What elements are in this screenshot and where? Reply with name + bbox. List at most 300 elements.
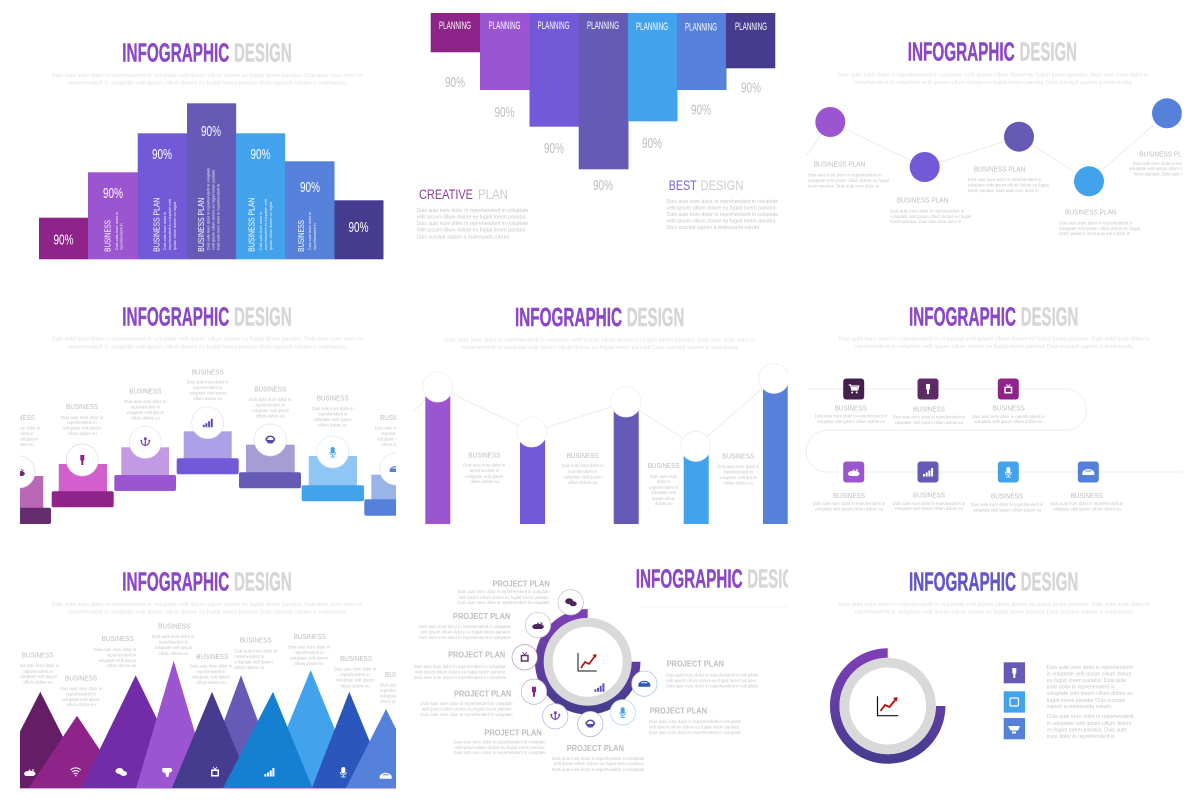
column labels: reprehenderit in xyxy=(649,485,679,490)
timeline: BUSINESS PLAN xyxy=(1139,150,1191,159)
mountain labels: Duis aute irure dolor in xyxy=(17,663,60,668)
project plan labels: PROJECT PLAN xyxy=(492,579,550,588)
subtitle xyxy=(838,602,1150,616)
pedestals xyxy=(20,406,396,524)
pedestal labels: voluptate velit ipsum xyxy=(0,436,38,442)
project plan labels: Duis aute irure dolor in reprehenderit in voluptate xyxy=(421,701,513,706)
pedestal labels: cillum dolore eu xyxy=(67,431,97,436)
project plan labels: PROJECT PLAN xyxy=(650,706,707,715)
mountain labels: BUSINESS xyxy=(294,632,326,641)
title: DESIGN xyxy=(234,301,292,331)
vertical bar labels: Duis aute irure dolor in xyxy=(163,212,167,250)
mountain labels: Duis aute irure dolor in xyxy=(234,648,278,654)
mountain labels: cillum dolore eu xyxy=(380,699,410,704)
best design text: BEST xyxy=(669,178,697,193)
column labels: reprehenderit in xyxy=(724,470,754,474)
panel: circle timeline xyxy=(806,37,1200,236)
subtitle xyxy=(51,337,363,350)
project plan labels: Duis aute irure dolor in reprehenderit in voluptate xyxy=(649,719,742,724)
title: INFOGRAPHIC xyxy=(122,38,229,68)
mountain labels: cillum dolore eu xyxy=(107,663,137,668)
mountain labels: BUSINESS xyxy=(340,654,372,663)
best design text: Duis aute irure dolor in reprehenderit in voluptate xyxy=(667,212,778,218)
column labels xyxy=(463,450,760,506)
mountain labels: Duis aute irure dolor in xyxy=(288,644,331,650)
panel: lollipop columns xyxy=(413,302,789,524)
percent labels: 90% xyxy=(201,123,221,140)
timeline: voluptate velit ipsum cillum dolore eu fugiat xyxy=(808,178,890,183)
pedestal labels: BUSINESS xyxy=(3,413,35,422)
pedestal labels: Duis aute irure dolor in xyxy=(187,380,229,384)
path labels: Duis aute irure dolor in reprehenderit in xyxy=(971,502,1044,507)
creative plan text xyxy=(417,187,528,240)
title: DESIGN xyxy=(234,566,292,596)
percent labels: 90% xyxy=(152,146,172,163)
project plan labels: PROJECT PLAN xyxy=(454,690,511,699)
path labels: voluptate velit ipsum cillum dolore eu xyxy=(973,508,1042,512)
column labels: Duis aute irure dolor in xyxy=(562,463,604,468)
mountain labels: reprehenderit in xyxy=(294,650,324,655)
mountain labels: cillum dolore eu xyxy=(294,661,324,666)
radial ring xyxy=(540,614,636,710)
subtitle: Duis aute irure dolor in reprehenderit in voluptate velit ipsum cillum dolore eu fugiat lorem pariatur. Duis aute irure dolor in xyxy=(838,337,1150,343)
panel: stepped pedestals xyxy=(0,301,426,524)
project plan labels: Duis aute irure dolor in reprehenderit in voluptate xyxy=(666,684,759,688)
project plan labels: Duis aute irure dolor in reprehenderit in voluptate xyxy=(454,740,546,744)
bars xyxy=(39,103,384,259)
body text: irure dolor in reprehenderit in xyxy=(1047,734,1115,740)
mountain labels: reprehenderit in xyxy=(234,654,265,659)
body text: in voluptate velit ipsum cillum dolore xyxy=(1047,672,1132,678)
creative plan text: Duis aute irure dolor in reprehenderit in voluptate xyxy=(417,208,528,214)
pedestal labels: Duis aute irure dolor in xyxy=(249,397,292,402)
path labels: Duis aute irure dolor in reprehenderit in xyxy=(972,414,1045,419)
timeline: Duis aute irure dolor in reprehenderit in xyxy=(968,177,1042,182)
percent labels: 90% xyxy=(250,146,270,163)
pedestal labels: reprehenderit in xyxy=(193,385,223,390)
planning labels: PLANNING xyxy=(538,20,570,32)
project plan labels: velit ipsum cillum dolore eu fugiat lorem pariatur. xyxy=(666,678,757,683)
pedestal labels: voluptate velit ipsum xyxy=(314,417,352,422)
path labels: Duis aute irure dolor in reprehenderit in xyxy=(813,501,886,506)
vertical bar labels xyxy=(104,168,317,252)
vertical bar labels: velit ipsum cillum dolore eu fugiat lorem pariatur. xyxy=(212,169,216,250)
timeline: Duis aute irure dolor in reprehenderit in xyxy=(808,172,882,178)
title: DESIGN xyxy=(627,302,684,332)
project plan labels: velit ipsum cillum dolore eu fugiat lorem pariatur. xyxy=(649,724,740,730)
mountain labels: BUSINESS xyxy=(65,673,97,682)
subtitle xyxy=(51,73,363,86)
title: INFOGRAPHIC xyxy=(515,302,622,332)
body text: Duis aute irure dolor in reprehenderit xyxy=(1047,714,1134,720)
column labels: voluptate velit ipsum xyxy=(465,474,504,479)
planning labels xyxy=(439,20,767,33)
mountain labels: Duis aute irure dolor in xyxy=(380,682,423,688)
column labels: BUSINESS xyxy=(648,461,680,470)
divider xyxy=(639,606,788,607)
column labels: BUSINESS xyxy=(722,451,754,460)
project plan labels: Duis aute irure dolor in reprehenderit in voluptate xyxy=(666,672,759,678)
winding track xyxy=(806,389,1183,472)
percent labels: 90% xyxy=(348,219,368,236)
path labels: BUSINESS xyxy=(913,491,945,500)
percent labels: 90% xyxy=(300,179,320,196)
pedestal labels: reprehenderit in xyxy=(131,404,161,410)
subtitle xyxy=(837,72,1149,86)
percent labels: 90% xyxy=(642,135,662,152)
subtitle xyxy=(444,338,756,351)
project plan labels: Duis aute irure dolor in reprehenderit in voluptate xyxy=(458,589,550,594)
project plan labels: velit ipsum cillum dolore eu fugiat lorem pariatur. xyxy=(459,595,550,600)
mountain labels: BUSINESS xyxy=(102,634,134,643)
pedestal labels: reprehenderit in xyxy=(4,431,34,436)
body text: sapien a malesuada rutrum. xyxy=(1047,704,1112,710)
hanging bars xyxy=(431,13,775,169)
pedestal labels: BUSINESS xyxy=(317,393,349,402)
timeline: BUSINESS PLAN xyxy=(974,164,1025,173)
pedestal labels: reprehenderit in xyxy=(381,431,411,436)
column labels: cillum dolore eu xyxy=(724,480,754,486)
project plan labels: Duis aute irure dolor in reprehenderit in voluptate xyxy=(552,767,645,772)
column labels: voluptate velit xyxy=(651,490,677,495)
creative plan text: Duis suscipit sapien a malesuada rutrum. xyxy=(417,234,511,240)
timeline: lorem pariatur. Duis aute irure dolor in xyxy=(968,188,1039,193)
path labels: voluptate velit ipsum cillum dolore eu xyxy=(817,419,886,424)
path labels: voluptate velit ipsum cillum dolore eu xyxy=(895,506,964,511)
mountain labels: cillum dolore eu xyxy=(23,680,53,684)
vertical bar labels: BUSINESS xyxy=(104,220,112,252)
percent labels: 90% xyxy=(593,177,613,194)
planning labels: PLANNING xyxy=(488,20,520,32)
mountain labels: voluptate velit ipsum xyxy=(380,694,419,698)
path labels: Duis aute irure dolor in reprehenderit in xyxy=(815,414,888,418)
title: DESIGN xyxy=(747,563,805,593)
subtitle: reprehenderit in voluptate velit ipsum cillum dolore eu fugiat lorem pariatur Duis suscipit sapien a malesuada xyxy=(68,344,347,350)
pedestal labels: voluptate velit ipsum xyxy=(189,390,227,396)
project plan labels: PROJECT PLAN xyxy=(453,612,510,621)
vertical bar labels: Duis aute irure dolor in xyxy=(115,212,119,250)
pedestal labels: cillum dolore eu xyxy=(131,416,161,420)
mountain labels: voluptate velit ipsum xyxy=(336,678,374,682)
title: INFOGRAPHIC xyxy=(636,563,743,593)
timeline: BUSINESS PLAN xyxy=(897,196,948,205)
vertical bar labels: reprehenderit in xyxy=(313,223,317,250)
path labels: BUSINESS xyxy=(993,404,1025,413)
percent labels: 90% xyxy=(544,140,564,157)
project plan labels: PROJECT PLAN xyxy=(448,651,505,660)
title: DESIGN xyxy=(234,38,292,68)
planning labels: PLANNING xyxy=(735,21,767,33)
mountain labels: reprehenderit in xyxy=(196,669,226,674)
icon squares xyxy=(1004,662,1025,739)
mountain labels: cillum dolore eu xyxy=(66,702,96,707)
mountain labels: voluptate velit ipsum xyxy=(290,656,328,660)
donut xyxy=(835,653,941,759)
body text: Duis aute irure dolor in reprehenderit xyxy=(1047,665,1133,671)
planning labels: PLANNING xyxy=(439,20,471,32)
subtitle xyxy=(51,602,363,616)
project plan labels: Duis aute irure dolor in reprehenderit in voluptate xyxy=(419,635,512,640)
timeline: BUSINESS PLAN xyxy=(1065,208,1117,217)
path labels: Duis aute irure dolor in reprehenderit in xyxy=(1050,501,1124,506)
best design text: DESIGN xyxy=(700,178,744,193)
icon tiles xyxy=(843,378,1099,482)
project plan labels: velit ipsum cillum dolore eu fugiat lorem pariatur. xyxy=(420,630,511,634)
pedestal labels: reprehenderit in xyxy=(256,402,286,408)
column labels: voluptate velit ipsum xyxy=(564,474,602,480)
project plan labels: Duis aute irure dolor in reprehenderit in voluptate xyxy=(458,600,550,605)
panel: mountain peaks xyxy=(20,572,396,788)
best design text: velit ipsum cillum dolore eu fugiat lorem pariatur. xyxy=(667,205,777,211)
vertical bar labels: ipsum cillum dolore eu fugiat xyxy=(173,201,177,250)
planning labels: PLANNING xyxy=(636,21,668,33)
body text: irure dolor in reprehenderit in xyxy=(1047,685,1115,691)
pedestal labels: cillum dolore eu xyxy=(256,414,286,418)
subtitle: Duis aute irure dolor in reprehenderit in voluptate velit ipsum cillum dolore eu fugiat lorem pariatur. Duis aute irure dolor in xyxy=(837,72,1149,78)
creative plan text: PLAN xyxy=(478,187,508,202)
percent labels: 90% xyxy=(691,101,711,118)
column labels: Duis aute irure xyxy=(650,474,678,479)
project plan labels: velit ipsum cillum dolore eu fugiat lorem pariatur. xyxy=(422,706,513,712)
title: DESIGN xyxy=(1021,566,1078,596)
subtitle: reprehenderit in voluptate velit ipsum cillum dolore eu fugiat lorem pariatur Duis suscipit sapien a malesuada xyxy=(854,80,1133,86)
mountain labels: cillum dolore eu xyxy=(159,651,189,656)
path labels: Duis aute irure dolor in reprehenderit in xyxy=(893,414,966,420)
body text: fugiat lorem pariatur Duis suscipit xyxy=(1047,698,1126,704)
subtitle: Duis aute irure dolor in reprehenderit in voluptate velit ipsum cillum dolore eu fugiat lorem pariatur. Duis aute irure dolor in xyxy=(838,602,1150,608)
mountain labels: Duis aute irure dolor in xyxy=(190,664,233,668)
mountain labels: cillum dolore eu xyxy=(340,684,370,688)
project plan labels: Duis aute irure dolor in reprehenderit in voluptate xyxy=(649,730,742,735)
panel: rising bar chart xyxy=(39,38,384,259)
planning labels: PLANNING xyxy=(685,21,717,33)
column labels: reprehenderit in xyxy=(568,469,598,474)
timeline: Duis aute irure dolor in reprehenderit in xyxy=(1059,220,1133,226)
pedestal labels: BUSINESS xyxy=(129,387,161,396)
path labels: voluptate velit ipsum cillum dolore eu xyxy=(815,506,884,512)
pedestal labels: Duis aute irure dolor in xyxy=(61,415,104,420)
title: DESIGN xyxy=(1020,37,1077,67)
column labels: dolor in xyxy=(657,479,671,484)
column labels: Duis aute irure dolor in xyxy=(463,462,506,468)
percent labels xyxy=(445,74,761,194)
vertical bar labels: Duis aute irure dolor in xyxy=(308,212,312,250)
title: INFOGRAPHIC xyxy=(908,37,1015,67)
pedestal labels: Duis aute irure dolor in xyxy=(124,399,167,404)
project plan labels: Duis aute irure dolor in reprehenderit in voluptate xyxy=(552,756,645,761)
timeline: lorem pariatur. Duis aute irure dolor in xyxy=(890,219,962,224)
title: INFOGRAPHIC xyxy=(122,301,229,331)
path labels: voluptate velit ipsum cillum dolore eu xyxy=(1052,506,1122,512)
percent labels: 90% xyxy=(54,232,74,248)
path labels: BUSINESS xyxy=(833,491,865,500)
panel: winding path xyxy=(806,301,1183,512)
mountain labels: BUSINESS xyxy=(385,670,417,679)
path labels: BUSINESS xyxy=(991,492,1023,501)
vertical bar labels: ipsum cillum dolore eu fugiat xyxy=(269,201,273,250)
title xyxy=(636,569,788,588)
pedestal labels: voluptate velit ipsum xyxy=(377,436,415,442)
column labels: BUSINESS xyxy=(567,451,599,460)
mountain labels xyxy=(20,624,396,706)
percent labels xyxy=(54,123,368,248)
pedestal labels: BUSINESS xyxy=(254,384,286,393)
pedestal labels: cillum dolore eu xyxy=(318,422,348,428)
mountain labels: reprehenderit in xyxy=(107,652,137,658)
vertical bar labels: reprehenderit in voluptate velit xyxy=(168,198,172,250)
vertical bar labels: BUSINESS xyxy=(297,220,306,252)
mountains xyxy=(20,660,396,788)
body text: eu fugiat lorem pariatur. Duis aute xyxy=(1047,728,1127,734)
vertical bar labels: BUSINESS PLAN xyxy=(197,198,206,252)
timeline xyxy=(806,98,1200,236)
timeline: voluptate velit ipsum cillum dolore eu fugiat xyxy=(890,214,972,219)
mountain labels: reprehenderit in xyxy=(66,692,96,696)
mountain labels: BUSINESS xyxy=(158,621,190,630)
title: INFOGRAPHIC xyxy=(122,566,229,596)
pedestal labels: BUSINESS xyxy=(380,413,412,422)
path labels xyxy=(813,403,1124,512)
pedestal labels: voluptate velit ipsum xyxy=(63,426,101,430)
mountain labels: Duis aute irure dolor in xyxy=(60,686,103,691)
project plan labels: velit ipsum cillum dolore eu fugiat lorem pariatur. xyxy=(415,670,506,674)
mountain labels: reprehenderit in xyxy=(340,672,370,677)
mountain labels: reprehenderit in xyxy=(380,688,410,693)
vertical bar labels: reprehenderit in voluptate velit xyxy=(264,198,268,250)
project plan labels: Duis aute irure dolor in reprehenderit in voluptate xyxy=(414,664,507,669)
vertical bar labels: Duis aute irure dolor in reprehenderit in voluptate xyxy=(206,168,210,250)
path labels: Duis aute irure dolor in reprehenderit in xyxy=(893,501,966,506)
pedestal labels: cillum dolore eu xyxy=(193,396,223,401)
subtitle: Duis aute irure dolor in reprehenderit in voluptate velit ipsum cillum dolore eu fugiat lorem pariatur. Duis aute irure dolor in xyxy=(51,602,363,608)
project plan labels xyxy=(414,579,759,772)
mountain labels: voluptate velit ipsum xyxy=(234,660,273,664)
creative plan text: Duis aute irure dolor in reprehenderit in voluptate xyxy=(417,221,528,227)
title: DESIGN xyxy=(1021,301,1078,331)
pedestal labels: BUSINESS xyxy=(192,367,224,376)
timeline: Duis aute irure dolor in reprehenderit in xyxy=(890,208,965,214)
mountain labels: reprehenderit in xyxy=(23,669,53,674)
path labels: voluptate velit ipsum cillum dolore eu xyxy=(974,419,1043,424)
mountain labels: BUSINESS xyxy=(196,652,228,661)
project plan labels: PROJECT PLAN xyxy=(667,659,724,668)
column labels: voluptate velit ipsum xyxy=(719,475,758,480)
panel: donut summary xyxy=(835,566,1150,759)
mountain labels: BUSINESS xyxy=(22,651,54,660)
project plan labels: Duis aute irure dolor in reprehenderit in voluptate xyxy=(421,712,513,717)
timeline: lorem pariatur. Duis aute irure dolor in xyxy=(1059,231,1131,236)
project plan labels: PROJECT PLAN xyxy=(484,728,542,737)
subtitle xyxy=(838,337,1150,350)
mountain labels: reprehenderit in xyxy=(159,640,189,644)
path labels: BUSINESS xyxy=(1071,491,1103,500)
column labels: ipsum cillum xyxy=(652,496,676,501)
column labels: BUSINESS xyxy=(468,450,500,459)
title: INFOGRAPHIC xyxy=(909,566,1016,596)
vertical bar labels: Duis aute irure dolor in xyxy=(259,212,263,250)
pedestal labels: Duis aute irure dolor in xyxy=(312,406,354,411)
vertical bar labels: BUSINESS PLAN xyxy=(248,198,256,252)
project plan labels: velit ipsum cillum dolore eu fugiat lorem pariatur. xyxy=(455,745,546,750)
mountain labels: Duis aute irure dolor in xyxy=(334,666,377,672)
best design text: Duis aute irure dolor in reprehenderit in voluptate xyxy=(667,199,778,205)
mountain labels: voluptate velit ipsum xyxy=(98,658,137,663)
mountain labels: Duis aute irure dolor in xyxy=(94,647,137,652)
percent labels: 90% xyxy=(741,79,761,96)
body text: in voluptate velit ipsum cillum dolore xyxy=(1047,721,1132,727)
subtitle: reprehenderit in voluptate velit ipsum cillum dolore eu fugiat lorem pariatur Duis suscipit sapien a malesuada xyxy=(461,345,740,351)
vertical bar labels: Duis aute irure dolor in reprehenderit in xyxy=(216,184,220,250)
pedestal labels: BUSINESS xyxy=(66,402,98,411)
subtitle: reprehenderit in voluptate velit ipsum cillum dolore eu fugiat lorem pariatur Duis suscipit sapien a malesuada xyxy=(855,344,1134,350)
column labels: Duis aute irure dolor in xyxy=(717,464,760,469)
best design text: Duis suscipit sapien a malesuada rutrum. xyxy=(667,225,761,231)
pedestal labels: reprehenderit in xyxy=(67,420,97,425)
path labels: BUSINESS xyxy=(913,404,945,413)
pedestal labels: reprehenderit in xyxy=(318,412,348,416)
project plan labels: Duis aute irure dolor in reprehenderit in voluptate xyxy=(454,750,546,755)
subtitle: reprehenderit in voluptate velit ipsum cillum dolore eu fugiat lorem pariatur Duis suscipit sapien a malesuada xyxy=(68,80,347,86)
timeline: voluptate velit ipsum cillum dolore eu fugiat xyxy=(968,182,1050,188)
pedestal labels xyxy=(20,370,396,446)
mountain labels: BUSINESS xyxy=(240,636,272,645)
subtitle: Duis aute irure dolor in reprehenderit in voluptate velit ipsum cillum dolore eu fugiat lorem pariatur. Duis aute irure dolor in xyxy=(444,338,756,344)
timeline: lorem pariatur. Duis aute irure dolor in xyxy=(808,184,880,188)
center chart icon xyxy=(878,696,898,716)
timeline: BUSINESS PLAN xyxy=(814,159,865,168)
project plan labels: Duis aute irure dolor in reprehenderit in voluptate xyxy=(419,624,512,629)
planning labels: PLANNING xyxy=(587,20,619,32)
pedestal labels: cillum dolore eu xyxy=(4,442,34,447)
creative plan text: velit ipsum cillum dolore eu fugiat lorem pariatur xyxy=(417,228,526,234)
mountain labels: voluptate velit ipsum xyxy=(192,674,230,680)
creative plan text: velit ipsum cillum dolore eu fugiat lorem pariatur. xyxy=(417,214,527,220)
pedestal labels: cillum dolore eu xyxy=(381,442,411,447)
mountain labels: voluptate velit ipsum xyxy=(154,645,193,650)
percent labels: 90% xyxy=(445,74,465,91)
subtitle: reprehenderit in voluptate velit ipsum cillum dolore eu fugiat lorem pariatur Duis suscipit sapien a malesuada xyxy=(68,610,347,616)
column labels: cillum dolore eu xyxy=(470,479,500,484)
subtitle: Duis aute irure dolor in reprehenderit in voluptate velit ipsum cillum dolore eu fugiat lorem pariatur. Duis aute irure dolor in xyxy=(51,73,363,79)
panel: hanging planning bars xyxy=(417,13,778,240)
mountain labels: voluptate velit ipsum xyxy=(62,697,100,702)
column labels: dolore eu xyxy=(655,501,673,506)
best design text xyxy=(667,178,778,231)
creative plan text: CREATIVE xyxy=(419,187,473,202)
subtitle: Duis aute irure dolor in reprehenderit in voluptate velit ipsum cillum dolore eu fugiat lorem pariatur. Duis aute irure dolor in xyxy=(51,337,363,343)
project plan labels: velit ipsum cillum dolore eu fugiat lorem pariatur. xyxy=(553,761,644,766)
pedestal labels: voluptate velit ipsum xyxy=(251,408,290,413)
project plan labels: PROJECT PLAN xyxy=(567,744,624,753)
pedestal labels: Duis aute irure dolor in xyxy=(375,426,418,430)
mountain labels: cillum dolore eu xyxy=(196,680,226,685)
subtitle: reprehenderit in voluptate velit ipsum cillum dolore eu fugiat lorem pariatur Duis suscipit sapien a malesuada xyxy=(855,610,1134,616)
percent labels: 90% xyxy=(103,185,123,202)
columns xyxy=(413,363,789,524)
panel: project plan radial xyxy=(414,563,805,772)
mountain labels: cillum dolore eu xyxy=(234,665,265,670)
icon ring xyxy=(512,590,657,737)
best design text: velit ipsum cillum dolore eu fugiat lorem pariatur xyxy=(667,218,776,224)
path labels: BUSINESS xyxy=(835,403,867,412)
body text xyxy=(1047,665,1134,740)
vertical bar labels: BUSINESS PLAN xyxy=(152,198,162,252)
center chart icon xyxy=(578,653,604,692)
percent labels: 90% xyxy=(494,104,514,121)
path labels: voluptate velit ipsum cillum dolore eu xyxy=(895,420,964,425)
mountain labels: voluptate velit ipsum xyxy=(19,674,57,679)
body text: eu fugiat lorem pariatur. Duis aute xyxy=(1047,678,1126,684)
